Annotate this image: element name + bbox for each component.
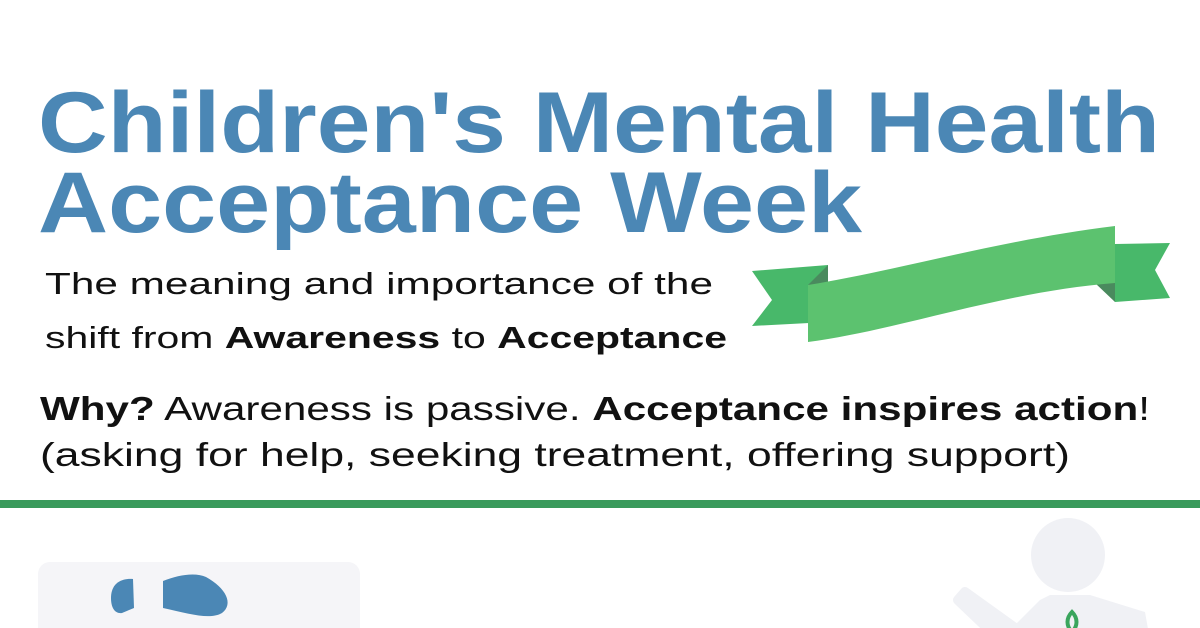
icon: person with ribbon [958,518,1150,628]
title: Children's Mental Health [38,75,1160,171]
subtitle: shift from Awareness to Acceptance [45,320,727,355]
title [38,75,1160,251]
why text [40,390,1150,473]
subtitle [45,266,727,355]
title: Acceptance Week [38,155,862,251]
why text: (asking for help, seeking treatment, offering support) [40,436,1070,473]
subtitle: The meaning and importance of the [45,266,713,301]
why text: Why? Awareness is passive. Acceptance inspires action ! [40,390,1150,427]
card panel with footprint icon [38,562,360,628]
ribbon banner [752,226,1170,342]
divider line [0,500,1200,508]
icon: footprint [111,574,228,616]
